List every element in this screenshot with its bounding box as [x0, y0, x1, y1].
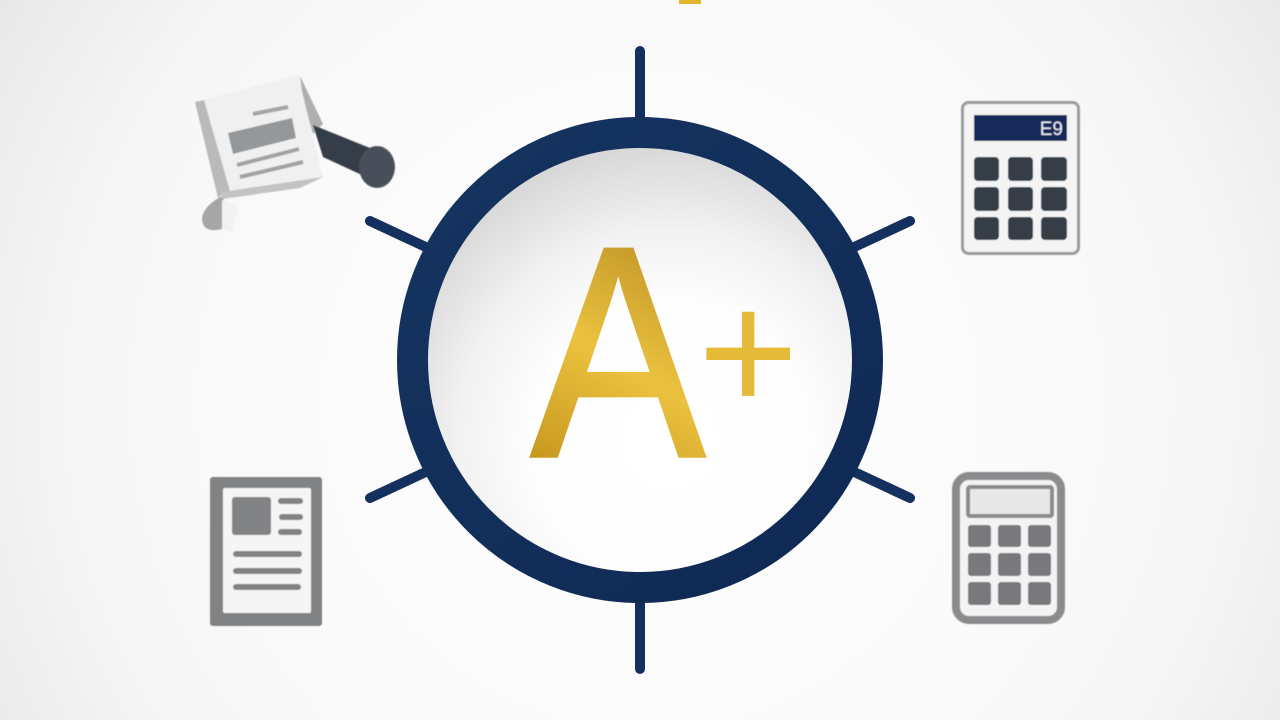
- calculator keys: [968, 525, 1051, 605]
- paper title line: [253, 107, 288, 114]
- curled paper corner: [202, 195, 224, 230]
- icon: report document: [210, 477, 322, 626]
- display digits: E9: [1040, 119, 1063, 140]
- calculator keys: [974, 157, 1067, 240]
- gold marker at top edge: [679, 0, 701, 4]
- calculator body: [956, 476, 1061, 620]
- navy ring: [412, 132, 868, 588]
- radial spokes: [370, 51, 910, 669]
- icon: tilted document with dark handle: [195, 75, 395, 232]
- handle knob: [359, 146, 395, 188]
- dark handle: [313, 125, 370, 176]
- paper fold: [300, 76, 323, 134]
- inner disc: [426, 146, 854, 574]
- document image block: [232, 497, 271, 535]
- grade text: plus: +: [698, 256, 798, 448]
- icon: calculator with grey keys: [956, 476, 1061, 620]
- paper text lines: [237, 149, 299, 165]
- icon: calculator with dark keys: [962, 102, 1078, 254]
- calculator display: [974, 115, 1067, 141]
- grade text: A: A: [531, 184, 706, 520]
- document page: [223, 488, 311, 613]
- document frame: [210, 477, 322, 626]
- calculator display: [968, 487, 1052, 516]
- paper image block: [228, 118, 296, 154]
- central badge: [412, 132, 868, 588]
- calculator body: [962, 102, 1078, 254]
- paper sheet: [195, 75, 323, 192]
- document text lines: [236, 501, 300, 587]
